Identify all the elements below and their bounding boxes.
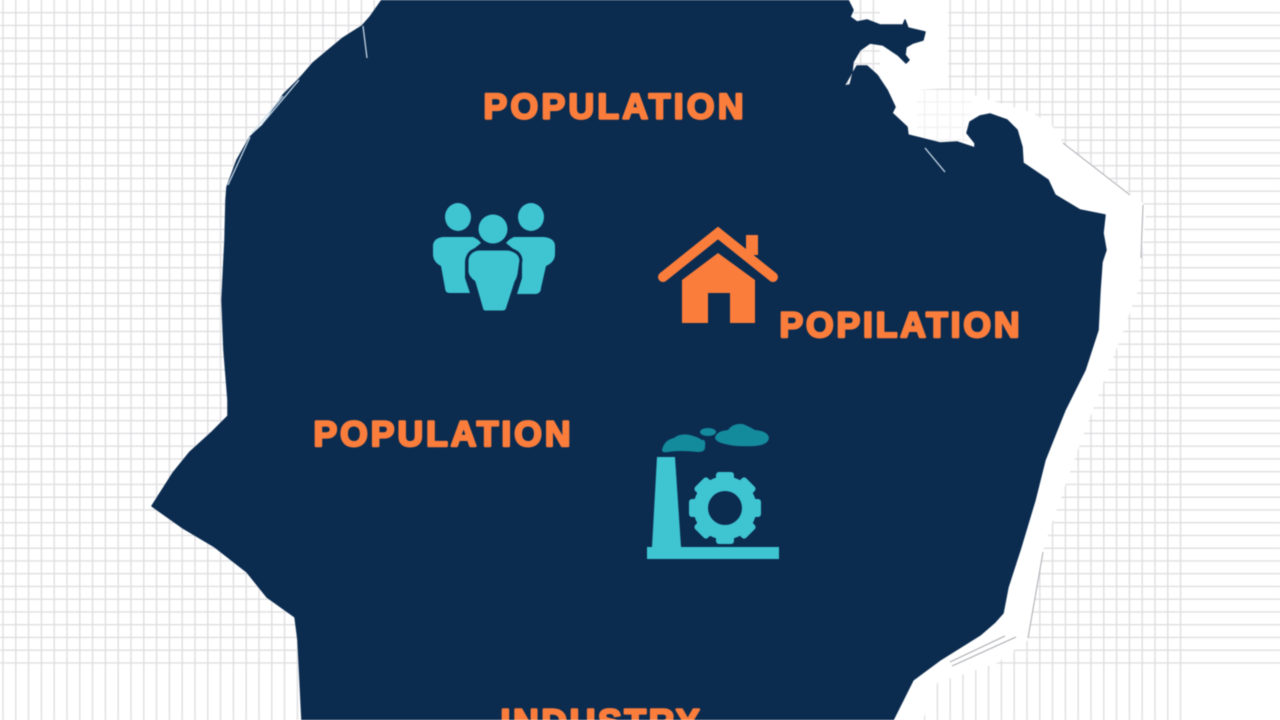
dark navy torn map shape: [152, 0, 1106, 720]
heading: population left: POPULATION: [314, 414, 570, 454]
heading: population top: POPULATION: [484, 86, 744, 126]
gear: [689, 472, 761, 544]
icon: factory with gear: [647, 424, 779, 559]
icon: people group: [433, 203, 555, 312]
torn white paper edge: [840, 0, 1146, 720]
icon: orange house: [663, 233, 773, 323]
smoke clouds: [662, 424, 769, 452]
heading: popilation right: POPILATION: [780, 305, 1020, 345]
paper scratches on map: [228, 26, 945, 185]
